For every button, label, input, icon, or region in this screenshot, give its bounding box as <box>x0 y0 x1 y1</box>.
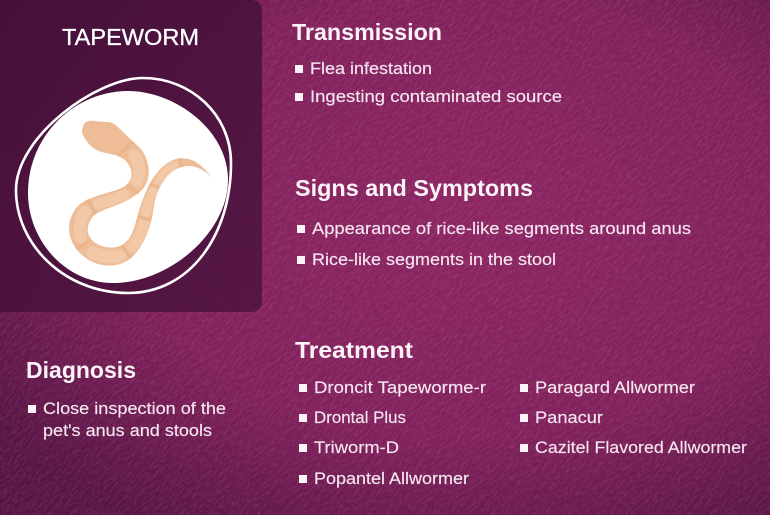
list: treatment column 2: Paragard Allwormer <box>535 379 696 397</box>
panel: tapeworm illustration <box>0 0 262 312</box>
list: treatment column 2: Panacur <box>535 409 604 427</box>
section: treatment <box>295 337 748 488</box>
list: diagnosis: pet's anus and stools <box>43 422 212 440</box>
list: signs <box>297 220 691 269</box>
list: signs: Appearance of rice-like segments around anus <box>312 220 691 238</box>
list: treatment column 1: Popantel Allwormer <box>314 470 470 488</box>
list: treatment column 1: Drontal Plus <box>314 409 406 427</box>
heading: transmission: Transmission <box>292 19 442 45</box>
heading: signs and symptoms: Signs and Symptoms <box>295 175 533 201</box>
list: treatment column 2: Cazitel Flavored Allwormer <box>535 439 748 457</box>
list: diagnosis: Close inspection of the <box>43 400 226 418</box>
list: treatment column 1: Triworm-D <box>314 439 399 457</box>
heading: diagnosis: Diagnosis <box>26 357 136 383</box>
list: signs: Rice-like segments in the stool <box>312 251 556 269</box>
list: transmission <box>295 60 562 106</box>
list: transmission: Flea infestation <box>310 60 432 78</box>
list: transmission: Ingesting contaminated source <box>310 88 562 106</box>
title: TAPEWORM <box>62 24 199 50</box>
section: signs and symptoms <box>295 175 691 269</box>
section: transmission <box>292 19 562 106</box>
list: treatment column 1: Droncit Tapeworme-r <box>314 379 487 397</box>
list: diagnosis <box>28 400 226 440</box>
heading: treatment: Treatment <box>295 337 413 363</box>
section: diagnosis <box>26 357 226 440</box>
list: treatment column 2 <box>520 379 748 457</box>
icon: tapeworm in circle <box>16 78 231 293</box>
list: treatment column 1 <box>299 379 487 488</box>
